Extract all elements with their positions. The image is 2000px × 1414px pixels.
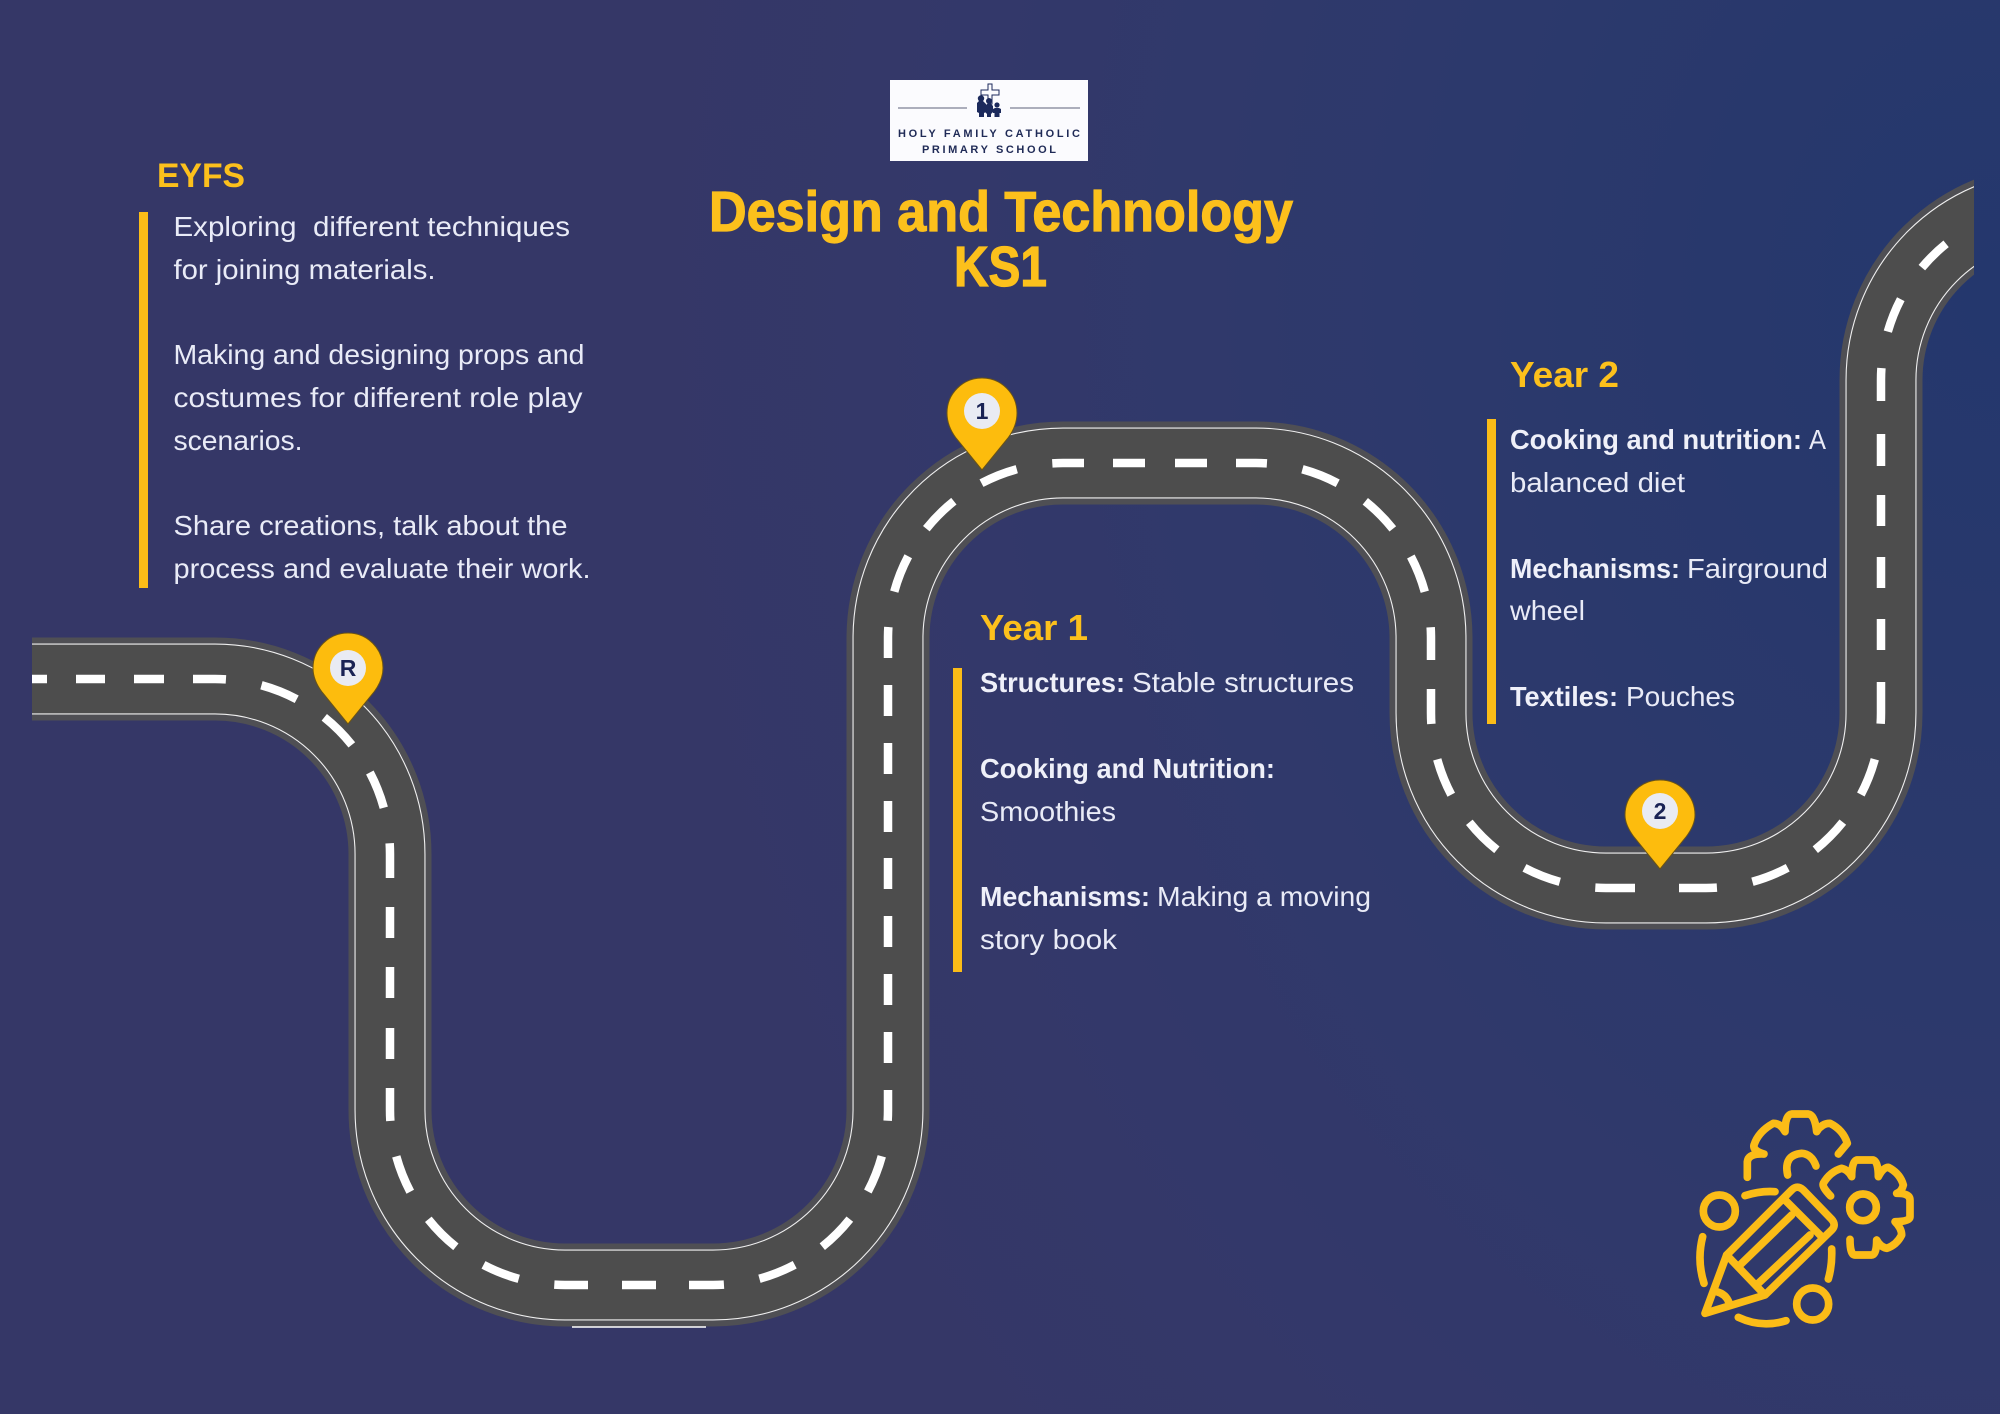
- text block: Year 2 units: Cooking and nutrition:: [1510, 424, 1802, 455]
- text block: Year 2 units: A: [1809, 424, 1826, 455]
- map pin: 2: [1625, 780, 1695, 869]
- road: [32, 205, 2000, 1327]
- text block: Year 1 units: Mechanisms:: [980, 881, 1150, 912]
- map pin: R: R: [340, 655, 357, 681]
- map pin: R: [313, 633, 383, 724]
- icon part: large gear: [1747, 1114, 1847, 1177]
- text block: Year 2 units: Mechanisms:: [1510, 553, 1680, 584]
- text block: EYFS activities: for joining materials.: [174, 254, 436, 285]
- icon part: pencil: [1705, 1187, 1834, 1313]
- text block: Year 2 units: Pouches: [1626, 681, 1735, 712]
- map pin: 1: [947, 378, 1017, 470]
- text block: EYFS activities: Exploring different techniques: [174, 211, 570, 242]
- text block: EYFS activities: scenarios.: [174, 425, 302, 456]
- text block: Year 2 units: balanced diet: [1510, 467, 1685, 498]
- logo: [890, 80, 1088, 161]
- text block: Year 1 units: story book: [980, 924, 1118, 955]
- text block: Year 1 units: Structures:: [980, 667, 1125, 698]
- text block: Year 2 units: Fairground: [1687, 553, 1828, 584]
- text block: Year 2 units: wheel: [1509, 595, 1585, 626]
- title: Design and Technology: [709, 180, 1293, 244]
- panel: Year 2: [1487, 354, 1828, 724]
- text block: Year 1 units: Making a moving: [1157, 881, 1371, 912]
- icon: pencil and gears: [1700, 1114, 1910, 1324]
- logo: HOLY FAMILY CATHOLIC: [898, 128, 1080, 140]
- text block: Year 1 units: [980, 667, 1371, 955]
- text block: Year 1 units: Stable structures: [1132, 667, 1354, 698]
- text block: Year 2 units: Textiles:: [1510, 681, 1618, 712]
- text block: Year 2 units: [1509, 424, 1828, 712]
- text block: EYFS activities: Share creations, talk about the: [174, 510, 568, 541]
- logo: PRIMARY SCHOOL: [922, 144, 1056, 156]
- text block: EYFS activities: Making and designing props and: [174, 339, 584, 370]
- text block: EYFS activities: [174, 211, 590, 584]
- text block: Year 1 units: Smoothies: [980, 796, 1116, 827]
- heading: EYFS: EYFS: [157, 157, 245, 195]
- panel: EYFS: [139, 157, 590, 588]
- title: [709, 180, 1293, 299]
- title: KS1: [954, 235, 1047, 299]
- icon part: small gear: [1823, 1160, 1910, 1255]
- icon part: dashed ring and dots: [1700, 1191, 1832, 1324]
- heading: Year 1: Year 1: [980, 607, 1088, 648]
- map pin: 1: 1: [976, 398, 989, 424]
- text block: Year 1 units: Cooking and Nutrition:: [980, 753, 1275, 784]
- map pin: 2: 2: [1654, 798, 1666, 824]
- text block: EYFS activities: costumes for different role play: [174, 382, 582, 413]
- heading: Year 2: Year 2: [1510, 354, 1619, 395]
- panel: Year 1: [953, 607, 1371, 972]
- text block: EYFS activities: process and evaluate their work.: [174, 553, 590, 584]
